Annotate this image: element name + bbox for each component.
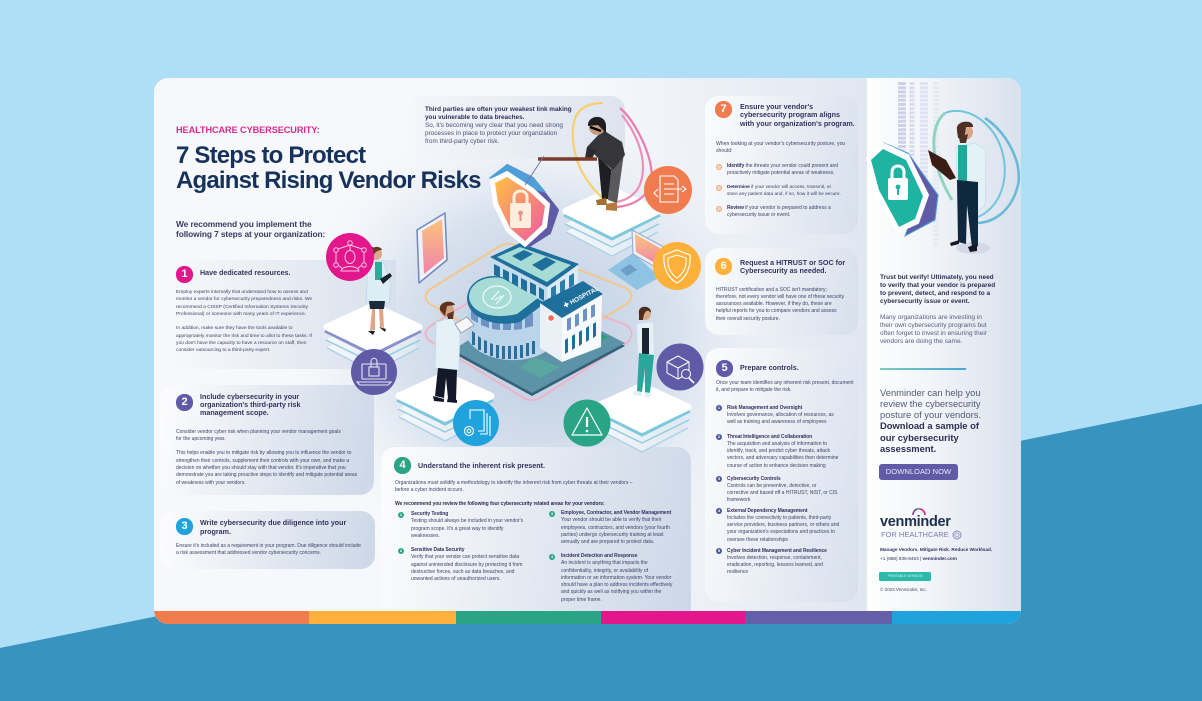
icon: documents gear	[453, 400, 499, 446]
venminder offer	[880, 386, 981, 454]
round wing	[468, 298, 545, 360]
badge 1: 1	[181, 268, 188, 280]
logo: venminder	[880, 514, 951, 530]
sidebar divider	[880, 368, 966, 370]
step 2 text: for the upcoming year.	[176, 436, 225, 442]
step 6 text: assurances available. However, if they do, these are	[716, 301, 832, 307]
item: risk management and oversight: well as training and awareness of employees	[727, 419, 826, 425]
right sidebar copy	[879, 274, 995, 592]
fishing rod	[538, 157, 597, 161]
panel: step 6	[705, 248, 858, 335]
sidebar rings	[934, 111, 1019, 223]
step 4 heading: Understand the inherent risk present.	[418, 462, 545, 470]
item: incident detection and response	[549, 553, 672, 603]
icon: laptop lock	[351, 349, 397, 395]
check item: determine: Determine if your vendor will access, transmit, or	[727, 184, 831, 190]
venminder offer: Download a sample of	[880, 420, 979, 431]
connection rings	[425, 244, 632, 400]
badge 6	[715, 258, 732, 275]
step 6 text	[716, 286, 844, 322]
step 7 heading: with your organization's program.	[740, 120, 855, 128]
sidebar doctor	[928, 122, 990, 254]
check item: identify: proactively mitigate potential areas of weakness.	[727, 170, 835, 176]
step 6 heading: Request a HITRUST or SOC for	[740, 259, 845, 267]
badge 5	[716, 360, 733, 377]
title: 7 Steps to Protect	[176, 142, 365, 169]
item: employee, contractor and vendor management: annually and are prepared to protect data.	[561, 539, 654, 545]
item: incident detection and response: and quickly as well as notifying you within the	[561, 589, 661, 595]
step 2 text: demonstrate you are taking proactive steps to identify and mitigate potential areas	[176, 472, 357, 478]
step 7 intro: When looking at your vendor's cybersecurity posture, you	[716, 140, 845, 146]
check item: determine	[716, 184, 841, 197]
item: cyber incident management and resilience: 5	[718, 548, 720, 553]
badge 5: 5	[721, 362, 728, 374]
panel: step 5	[705, 348, 858, 602]
callout text: So, it's becoming very clear that you need strong	[425, 122, 563, 129]
item: sensitive data security: against unintended disclosure by protecting it from	[411, 562, 522, 568]
step 2 heading: Include cybersecurity in your	[200, 392, 299, 400]
step 1 text: Professional) or someone with many years of IT experience.	[176, 312, 306, 317]
item: cybersecurity controls: Controls can be preventive, detective, or	[727, 483, 816, 489]
item: risk management and oversight	[716, 404, 834, 425]
nurse	[633, 307, 654, 398]
item: external dependency management: Includes the connectivity to patients, third-party	[727, 515, 831, 521]
item: incident detection and response: information or an information system. Your vendor	[561, 575, 671, 581]
item: security testing	[398, 511, 523, 539]
icon: network people	[326, 233, 374, 281]
item: cybersecurity controls	[716, 476, 838, 503]
item: cyber incident management and resilience: Involves detection, response, containment,	[727, 555, 822, 561]
sidebar paragraph: their own cybersecurity programs but	[880, 322, 987, 329]
trust but verify statement: to prevent, detect, and respond to a	[880, 290, 990, 297]
item: external dependency management	[716, 508, 839, 543]
check item: identify: Identify the threats your vendor could present and	[727, 162, 838, 168]
helipad	[467, 276, 545, 324]
item: external dependency management: 4	[718, 508, 720, 513]
step 3 text	[176, 542, 361, 556]
step 3 heading	[200, 519, 346, 536]
panel: step 3	[160, 511, 375, 569]
panel: step 1	[160, 260, 396, 369]
step 1 text: consider outsourcing to a third-party expert.	[176, 348, 270, 353]
item: risk management and oversight: Risk Management and Oversight	[727, 404, 802, 410]
step 3 heading: Write cybersecurity due diligence into your	[200, 519, 346, 527]
step 6 text: therefore, not every vendor will have one of these security	[716, 294, 844, 300]
item: incident detection and response: should have a plan to address incidents effectively	[561, 582, 672, 588]
step 4 intro: before a cyber incident occurs.	[395, 487, 464, 493]
item: cybersecurity controls: 3	[718, 476, 720, 481]
check item: determine: store any patient data and, if so, how it will be secure.	[727, 192, 841, 197]
icon: warning triangle	[564, 400, 610, 446]
venminder offer: review the cybersecurity	[880, 398, 981, 409]
item: security testing: program scope. It's a great way to identify	[411, 526, 503, 532]
step 7 heading: cybersecurity program aligns	[740, 111, 840, 119]
trust but verify statement: cybersecurity issue or event.	[880, 298, 970, 305]
step 1 text: appropriately monitor the risk and time to allot to these tasks. If	[176, 334, 312, 339]
step 2 text: decision on whether you should stay with that vendor. It's imperative that you	[176, 465, 346, 471]
step 7 intro: should:	[716, 148, 732, 154]
step 2 heading: organization's third-party risk	[200, 401, 300, 409]
step 1 text: you don't have the capacity to have a resource on staff, then	[176, 341, 307, 346]
badge 4: 4	[399, 459, 406, 471]
item: employee, contractor and vendor management: parties) undergo cybersecurity training at least	[561, 532, 664, 538]
step 6 heading: Cybersecurity as needed.	[740, 267, 827, 275]
title	[176, 142, 481, 194]
item: sensitive data security: Sensitive Data Security	[411, 547, 464, 553]
item: sensitive data security: 2	[400, 548, 402, 553]
item: external dependency management: your organization's expectations and practices to	[727, 529, 835, 535]
icon: box search	[656, 344, 704, 390]
item: security testing: 1	[400, 512, 402, 517]
female doctor	[366, 246, 392, 335]
badge 3	[176, 518, 193, 535]
intro heading	[176, 219, 325, 239]
step 3 text: Ensure it's included as a requirement in your program. Due diligence should include	[176, 542, 361, 548]
hospital building	[453, 243, 625, 396]
tablet with data	[417, 213, 447, 283]
item: employee, contractor and vendor management: Your vendor should be able to verify that their	[561, 517, 661, 523]
badge 1	[176, 266, 193, 283]
rings around hacker	[573, 103, 652, 207]
sidebar paragraph: Many organizations are investing in	[880, 314, 982, 321]
item: threat intelligence and collaboration: Threat Intelligence and Collaboration	[727, 434, 812, 440]
item: security testing: Security Testing	[411, 511, 448, 517]
step 6 text: HITRUST certification and a SOC isn't mandatory;	[716, 286, 827, 292]
item: external dependency management: oversee these relationships	[727, 537, 788, 543]
check item: review: cybersecurity issue or event.	[727, 212, 790, 218]
item: cyber incident management and resilience: resilience	[727, 569, 748, 575]
item: cyber incident management and resilience	[716, 548, 827, 575]
item: incident detection and response: confidentiality, integrity, or availability of	[561, 568, 648, 574]
step 5 intro	[716, 380, 854, 393]
male doctor	[433, 302, 474, 403]
step 1 text: Employ experts internally that understand how to assess and	[176, 290, 308, 295]
step 2 text: Consider vendor cyber risk when planning your vendor management goals	[176, 428, 341, 434]
item: employee, contractor and vendor management: 3	[551, 511, 553, 516]
item: incident detection and response: An incident is anything that impacts the	[561, 560, 648, 566]
printable version tag	[879, 572, 931, 581]
sidebar shield	[867, 143, 938, 236]
item: risk management and oversight: Involves governance, allocation of resources, as	[727, 412, 834, 418]
contact details: +1 (888) 836-8463 | venminder.com	[880, 556, 957, 561]
contact details	[880, 547, 992, 561]
badge 6: 6	[720, 260, 727, 272]
platform: top right	[564, 190, 660, 256]
item: threat intelligence and collaboration: identify, track, and predict cyber threats, attack	[727, 448, 830, 454]
callout text: Third parties are often your weakest link making	[425, 106, 572, 113]
step 1 text: monitor a vendor for cybersecurity preparedness and risks. We	[176, 297, 312, 302]
item: external dependency management: External Dependency Management	[727, 508, 807, 514]
title: Against Rising Vendor Risks	[176, 167, 481, 194]
item: incident detection and response: Incident Detection and Response	[561, 553, 637, 559]
badge 3: 3	[181, 520, 188, 532]
check item: identify	[716, 162, 838, 176]
step 7 heading	[740, 103, 855, 128]
step 2 heading: management scope.	[200, 409, 269, 417]
step 1 text: In addition, make sure they have the tools available to	[176, 326, 293, 331]
icon: shield outline	[653, 242, 701, 290]
item: cybersecurity controls: Cybersecurity Controls	[727, 476, 781, 482]
step 5 intro: Once your team identifies any inherent risk present, document	[716, 380, 854, 386]
badge 2: 2	[181, 396, 188, 408]
panel: third parties callout	[409, 96, 625, 159]
platform: bottom left	[397, 375, 493, 441]
badge 7: 7	[720, 103, 727, 115]
step 7 heading: Ensure your vendor's	[740, 103, 813, 111]
trust but verify statement	[880, 274, 995, 305]
panel: step 7	[705, 96, 858, 234]
venminder offer: posture of your vendors.	[880, 409, 981, 420]
panel: step 2	[160, 385, 374, 495]
step 6 text: their overall security posture.	[716, 316, 780, 322]
download button	[879, 464, 958, 480]
item: cybersecurity controls: framework	[727, 497, 750, 503]
item: cybersecurity controls: corrective and based off a HITRUST, NIST, or CIS	[727, 490, 838, 496]
intro heading: following 7 steps at your organization:	[176, 229, 325, 239]
sidebar paragraph: often forget to invest in ensuring their	[880, 330, 987, 337]
item: external dependency management: service providers, business partners, or others and	[727, 522, 839, 528]
platform: left	[325, 306, 421, 372]
venminder offer: our cybersecurity	[880, 432, 959, 443]
step 2 text: of weakness with your vendors.	[176, 480, 246, 486]
callout text	[425, 106, 572, 145]
callout text: you vulnerable to data breaches.	[425, 114, 524, 121]
item: risk management and oversight: 1	[718, 405, 720, 410]
trust but verify statement: to verify that your vendor is prepared	[880, 282, 995, 289]
step 1 heading: Have dedicated resources.	[200, 269, 290, 277]
hospital block	[540, 303, 562, 362]
venminder offer: assessment.	[880, 443, 936, 454]
badge 7	[715, 101, 732, 118]
item: sensitive data security: Verify that your vendor can protect sensitive data	[411, 554, 519, 560]
hospital sign: ✚ HOSPITAL	[563, 285, 600, 310]
infographic card	[154, 78, 1021, 624]
item: cyber incident management and resilience: Cyber Incident Management and Resilience	[727, 548, 827, 554]
check item: review	[716, 204, 831, 218]
sidebar paragraph	[880, 314, 987, 345]
step 5 intro: it, and prepare to mitigate the risk.	[716, 387, 792, 393]
item: sensitive data security: destructive forces, such as data breaches, and	[411, 569, 514, 575]
step 2 heading	[200, 392, 300, 417]
venminder offer: Venminder can help you	[880, 386, 981, 398]
item: threat intelligence and collaboration: The acquisition and analysis of information to	[727, 441, 827, 447]
callout text: processes in place to protect your organization	[425, 130, 557, 137]
step 2 text: strengthen their controls, supplement their controls with your own, and make a	[176, 458, 349, 464]
upper block	[490, 258, 547, 312]
eyebrow heading: HEALTHCARE CYBERSECURITY:	[176, 125, 320, 135]
sidebar paragraph: vendors are doing the same.	[880, 338, 962, 345]
icon: shield with lock	[490, 165, 558, 247]
step 4 intro	[395, 480, 633, 493]
callout text: from third-party cyber risk.	[425, 138, 499, 145]
step 2 text: This helps enable you to mitigate risk by allowing you to influence the vendor to	[176, 450, 351, 456]
panel: step 4	[381, 447, 691, 611]
trust but verify statement: Trust but verify! Ultimately, you need	[880, 274, 994, 281]
step 4 intro: Organizations must solidify a methodology to identify the inherent risk from cyber threats at their vendors –	[395, 480, 633, 486]
download button: DOWNLOAD NOW	[886, 467, 951, 476]
logo	[880, 508, 962, 540]
step 2 text	[176, 428, 358, 486]
badge 2	[176, 394, 193, 411]
check item: review: Review if your vendor is prepared to address a	[727, 204, 831, 210]
item: security testing: Testing should always be included in your vendor's	[411, 518, 523, 524]
step 1 text	[176, 290, 312, 353]
item: sensitive data security	[398, 547, 522, 582]
item: employee, contractor and vendor management: employees, contractors, and vendors (your fourth	[561, 525, 670, 531]
hacker figure	[525, 117, 625, 211]
step 3 heading: program.	[200, 528, 231, 536]
step 4 lead-in: We recommend you review the following four cybersecurity related areas for your vendors:	[395, 500, 605, 506]
item: security testing: weaknesses.	[411, 533, 440, 539]
icon: document arrows	[644, 166, 692, 214]
item: threat intelligence and collaboration	[716, 434, 838, 469]
step 1 text: recommend a CISSP (Certified Information Systems Security	[176, 305, 308, 310]
item: employee, contractor and vendor management	[549, 510, 672, 545]
item: threat intelligence and collaboration: 2	[718, 434, 720, 439]
intro heading: We recommend you implement the	[176, 219, 312, 229]
sidebar faint data column	[902, 82, 936, 247]
item: sensitive data security: unwanted actions of unauthorized users.	[411, 576, 501, 582]
badge 4	[394, 457, 411, 474]
logo: FOR HEALTHCARE	[881, 530, 949, 539]
item: employee, contractor and vendor management: Employee, Contractor, and Vendor Management	[561, 510, 671, 516]
item: incident detection and response: proper time frame.	[561, 597, 602, 603]
step 7 intro	[716, 140, 845, 154]
item: threat intelligence and collaboration: vectors, and adversary capabilities then determine	[727, 455, 838, 461]
step 6 heading	[740, 259, 846, 275]
step 3 text: a risk assessment that addressed vendor cybersecurity concerns.	[176, 550, 321, 556]
copyright: © 2023 Venminder, Inc.	[880, 587, 927, 592]
item: threat intelligence and collaboration: course of action to enhance decision making	[727, 463, 826, 469]
printable version tag: PRINTABLE VERSION	[888, 574, 922, 578]
laptop	[608, 230, 664, 290]
item: cyber incident management and resilience: eradication, reporting, lessons learned, and	[727, 562, 823, 568]
contact details: Manage Vendors. Mitigate Risk. Reduce Workload.	[880, 547, 992, 552]
step 5 heading: Prepare controls.	[740, 364, 799, 372]
item: incident detection and response: 4	[551, 554, 553, 559]
step 6 text: helpful reports for you to compare vendors and assess	[716, 308, 837, 314]
platform: bottom right	[594, 386, 690, 452]
